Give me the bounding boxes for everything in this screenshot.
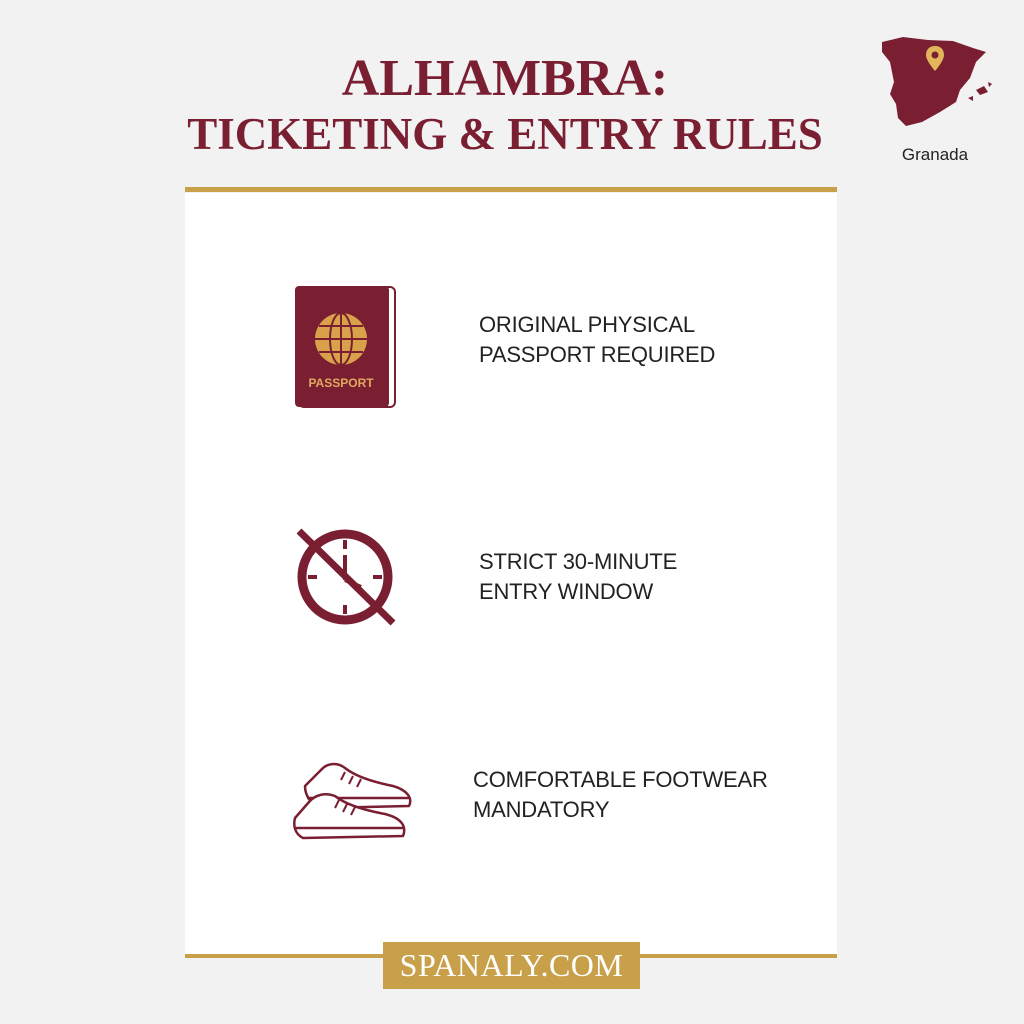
text: entry window rule: ENTRY WINDOW [479, 579, 653, 604]
footer badge [383, 942, 640, 989]
map: Spain with Granada [882, 37, 992, 164]
icon: passport: PASSPORT [308, 376, 374, 390]
icon: passport [295, 286, 396, 408]
text: entry window rule: STRICT 30-MINUTE [479, 549, 677, 574]
title: TICKETING & ENTRY RULES [187, 109, 823, 159]
text: passport rule: PASSPORT REQUIRED [479, 342, 715, 367]
map: Spain with Granada: Granada [902, 145, 968, 164]
panel: white content area [185, 193, 837, 955]
footer badge: SPANALY.COM [400, 947, 623, 983]
gold divider top [185, 187, 837, 192]
text: footwear rule [473, 767, 768, 822]
icon: no clock [296, 528, 396, 626]
text: passport rule [479, 312, 715, 367]
title [187, 50, 823, 159]
title: ALHAMBRA: [342, 50, 668, 107]
text: passport rule: ORIGINAL PHYSICAL [479, 312, 695, 337]
icon: shoes [293, 762, 412, 840]
text: footwear rule: COMFORTABLE FOOTWEAR [473, 767, 768, 792]
text: footwear rule: MANDATORY [473, 797, 609, 822]
text: entry window rule [479, 549, 677, 604]
gold divider bottom [185, 954, 837, 958]
